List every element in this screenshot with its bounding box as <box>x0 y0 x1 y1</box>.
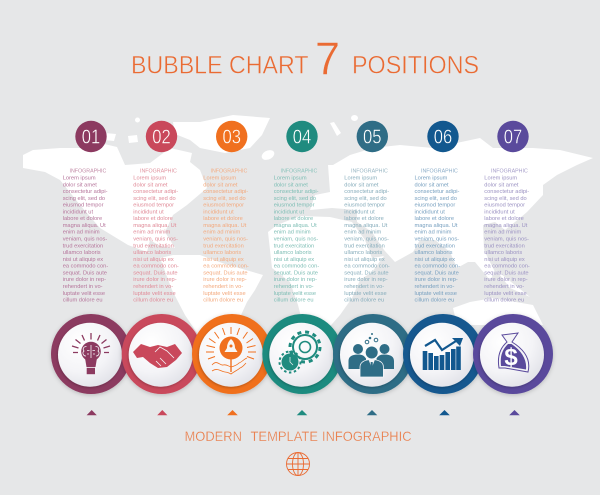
text column 7: rehendert in vo- <box>484 284 524 290</box>
text column 2: eiusmod tempor <box>133 203 174 209</box>
text column 4: INFOGRAPHIC <box>280 168 317 174</box>
text column 1: rehendert in vo- <box>63 284 103 290</box>
text column 4: sequat. Duis aute <box>274 270 318 276</box>
text column 4: veniam, quis nos- <box>274 237 318 243</box>
text column 1: INFOGRAPHIC <box>70 168 106 174</box>
text column 4: nisi ut aliquip ex <box>274 257 314 263</box>
number badge 05: 05 <box>363 127 382 149</box>
text column 1: sequat. Duis aute <box>63 270 107 276</box>
text column 3: magna aliqua. Ut <box>203 223 247 229</box>
world map <box>23 115 593 350</box>
text column 1: magna aliqua. Ut <box>63 223 106 229</box>
text column 5: incididunt ut <box>344 209 375 215</box>
text column 4: incididunt ut <box>274 209 304 215</box>
icon: money bag: $ <box>504 344 518 371</box>
text column 2: sequat. Duis aute <box>133 270 178 276</box>
text column 5: rehendert in vo- <box>344 284 384 290</box>
text column 1: Lorem ipsum <box>63 176 96 182</box>
text column 2: rehendert in vo- <box>133 284 173 290</box>
text column 3: sequat. Duis aute <box>203 270 248 276</box>
text column 1: luptate velit esse <box>63 291 105 297</box>
text column 4: eiusmod tempor <box>274 203 315 209</box>
text column 3: cillum dolore eu <box>203 298 243 304</box>
footer heading: INFOGRAPHIC <box>322 428 412 444</box>
text column 6: cillum dolore eu <box>414 298 454 304</box>
text column 4: trud exercitation <box>274 243 314 249</box>
text column 6: eiusmod tempor <box>414 203 455 209</box>
text column 6: incididunt ut <box>414 209 445 215</box>
text column 4: rehendert in vo- <box>274 284 314 290</box>
text column 1: labore et dolore <box>63 216 102 222</box>
text column 2: enim ad minim <box>133 230 171 236</box>
text column 5: ullamco laboris <box>344 250 382 256</box>
text column 2: labore et dolore <box>133 216 173 222</box>
bubble 6 <box>403 314 483 394</box>
bubble 7 <box>473 314 553 394</box>
text column 7: nisi ut aliquip ex <box>484 257 525 263</box>
text column 2: magna aliqua. Ut <box>133 223 177 229</box>
text column 2: dolor sit amet <box>133 182 168 188</box>
text column 1: ea commodo con- <box>63 264 108 270</box>
number badge 03 <box>216 121 247 152</box>
text column 1: irure dolor in rep- <box>63 277 106 283</box>
text column 5: sequat. Duis aute <box>344 270 389 276</box>
text column 5: magna aliqua. Ut <box>344 223 388 229</box>
text column 3: consectetur adipi- <box>203 189 248 195</box>
text column 6: dolor sit amet <box>414 182 449 188</box>
number badge 02: 02 <box>152 127 171 149</box>
text column 4: ea commodo con- <box>274 264 319 270</box>
text column 7: scing elit, sed do <box>484 196 527 202</box>
text column 5: veniam, quis nos- <box>344 237 389 243</box>
text column 4: dolor sit amet <box>274 182 308 188</box>
text column 5: cillum dolore eu <box>344 298 384 304</box>
text column 3: rehendert in vo- <box>203 284 243 290</box>
text column 6: irure dolor in rep- <box>414 277 458 283</box>
text column 1: cillum dolore eu <box>63 298 103 304</box>
text column 2: incididunt ut <box>133 209 164 215</box>
text column 5: consectetur adipi- <box>344 189 389 195</box>
text column 4 <box>274 168 319 304</box>
text column 4: magna aliqua. Ut <box>274 223 317 229</box>
text column 6: ea commodo con- <box>414 264 460 270</box>
text column 3: scing elit, sed do <box>203 196 246 202</box>
text column 3: eiusmod tempor <box>203 203 244 209</box>
text column 2: irure dolor in rep- <box>133 277 177 283</box>
icon: gears <box>280 332 320 372</box>
text column 7: luptate velit esse <box>484 291 527 297</box>
text column 1: dolor sit amet <box>63 182 97 188</box>
text column 7: INFOGRAPHIC <box>491 168 528 174</box>
text column 7: enim ad minim <box>484 230 522 236</box>
text column 2: veniam, quis nos- <box>133 237 178 243</box>
text column 1: enim ad minim <box>63 230 100 236</box>
text column 7: dolor sit amet <box>484 182 519 188</box>
text column 3: luptate velit esse <box>203 291 246 297</box>
text column 7: magna aliqua. Ut <box>484 223 528 229</box>
text column 3: Lorem ipsum <box>203 176 236 182</box>
text column 1: trud exercitation <box>63 243 103 249</box>
text column 5: luptate velit esse <box>344 291 387 297</box>
text column 5: Lorem ipsum <box>344 176 377 182</box>
text column 3: INFOGRAPHIC <box>210 168 247 174</box>
text column 3 <box>203 168 249 304</box>
text column 2: cillum dolore eu <box>133 298 173 304</box>
text column 6: INFOGRAPHIC <box>421 168 458 174</box>
number badge 07 <box>497 121 529 152</box>
number badge 02 <box>146 121 177 152</box>
text column 6: enim ad minim <box>414 230 452 236</box>
text column 3: nisi ut aliquip ex <box>203 257 244 263</box>
text column 7: sequat. Duis aute <box>484 270 529 276</box>
text column 6: veniam, quis nos- <box>414 237 459 243</box>
text column 1: ullamco laboris <box>63 250 101 256</box>
text column 4: irure dolor in rep- <box>274 277 317 283</box>
number badge 07: 07 <box>504 127 522 149</box>
bubble 4 <box>262 314 342 394</box>
text column 7: eiusmod tempor <box>484 203 525 209</box>
text column 1: veniam, quis nos- <box>63 237 107 243</box>
text column 5 <box>344 168 390 304</box>
text column 5: trud exercitation <box>344 243 385 249</box>
text column 2: ea commodo con- <box>133 264 179 270</box>
icon: handshake <box>133 344 182 368</box>
text column 4: enim ad minim <box>274 230 311 236</box>
number badge 01 <box>75 121 107 152</box>
text column 2: Lorem ipsum <box>133 176 166 182</box>
text column 3: veniam, quis nos- <box>203 237 248 243</box>
text column 6: Lorem ipsum <box>414 176 448 182</box>
title: 7 <box>315 32 340 84</box>
number badge 04 <box>286 121 318 152</box>
text column 2: ullamco laboris <box>133 250 171 256</box>
text column 6: sequat. Duis aute <box>414 270 459 276</box>
bubble 5 <box>333 314 413 394</box>
number badge 06: 06 <box>434 127 452 149</box>
number badge 03: 03 <box>222 127 241 149</box>
text column 2: nisi ut aliquip ex <box>133 257 174 263</box>
text column 2: consectetur adipi- <box>133 189 178 195</box>
number badge 01: 01 <box>82 127 100 149</box>
bubble 1 <box>51 314 131 394</box>
text column 6: rehendert in vo- <box>414 284 454 290</box>
text column 2: trud exercitation <box>133 243 174 249</box>
text column 5: scing elit, sed do <box>344 196 387 202</box>
icon: business team <box>348 333 394 377</box>
text column 7: trud exercitation <box>484 243 525 249</box>
text column 7: ea commodo con- <box>484 264 530 270</box>
text column 5: irure dolor in rep- <box>344 277 388 283</box>
text column 6 <box>414 168 460 304</box>
text column 7: irure dolor in rep- <box>484 277 528 283</box>
text column 4: Lorem ipsum <box>274 176 307 182</box>
text column 1: eiusmod tempor <box>63 203 104 209</box>
text column 7: labore et dolore <box>484 216 524 222</box>
text column 2 <box>133 168 179 304</box>
text column 7: incididunt ut <box>484 209 515 215</box>
text column 7: veniam, quis nos- <box>484 237 529 243</box>
text column 2: luptate velit esse <box>133 291 176 297</box>
text column 2: scing elit, sed do <box>133 196 176 202</box>
text column 4: labore et dolore <box>274 216 313 222</box>
text column 7: ullamco laboris <box>484 250 522 256</box>
title: BUBBLE CHART <box>131 52 308 80</box>
text column 4: ullamco laboris <box>274 250 312 256</box>
text column 6: luptate velit esse <box>414 291 457 297</box>
title <box>131 32 479 84</box>
pointer triangles <box>87 410 520 415</box>
text column 7: consectetur adipi- <box>484 189 529 195</box>
text column 5: labore et dolore <box>344 216 384 222</box>
text column 3: irure dolor in rep- <box>203 277 247 283</box>
text column 5: nisi ut aliquip ex <box>344 257 385 263</box>
text column 6: magna aliqua. Ut <box>414 223 458 229</box>
text column 1 <box>63 168 108 304</box>
text column 3: enim ad minim <box>203 230 241 236</box>
text column 5: enim ad minim <box>344 230 382 236</box>
text column 3: trud exercitation <box>203 243 244 249</box>
text column 7: Lorem ipsum <box>484 176 517 182</box>
text column 1: consectetur adipi- <box>63 189 108 195</box>
footer heading: TEMPLATE <box>250 428 318 444</box>
text column 5: dolor sit amet <box>344 182 379 188</box>
text column 1: incididunt ut <box>63 209 93 215</box>
icon: light bulb <box>72 333 110 374</box>
number badge 06 <box>427 121 459 152</box>
text column 3: labore et dolore <box>203 216 243 222</box>
text column 2: INFOGRAPHIC <box>140 168 177 174</box>
number badge 05 <box>357 121 388 152</box>
number badge 04: 04 <box>293 127 311 149</box>
text column 5: INFOGRAPHIC <box>351 168 388 174</box>
text column 6: scing elit, sed do <box>414 196 457 202</box>
icon: globe <box>286 452 310 476</box>
text column 6: consectetur adipi- <box>414 189 459 195</box>
text column 1: nisi ut aliquip ex <box>63 257 103 263</box>
text column 6: trud exercitation <box>414 243 455 249</box>
text column 4: consectetur adipi- <box>274 189 319 195</box>
text column 5: eiusmod tempor <box>344 203 385 209</box>
text column 3: dolor sit amet <box>203 182 238 188</box>
text column 6: ullamco laboris <box>414 250 453 256</box>
text column 5: ea commodo con- <box>344 264 390 270</box>
bubble 2 <box>122 314 202 394</box>
text column 6: nisi ut aliquip ex <box>414 257 455 263</box>
bubble 3 <box>192 314 272 394</box>
footer heading <box>184 428 412 444</box>
text column 3: incididunt ut <box>203 209 234 215</box>
text column 3: ullamco laboris <box>203 250 241 256</box>
footer heading: MODERN <box>184 428 242 444</box>
text column 4: scing elit, sed do <box>274 196 316 202</box>
text column 1: scing elit, sed do <box>63 196 105 202</box>
text column 3: ea commodo con- <box>203 264 249 270</box>
text column 7: cillum dolore eu <box>484 298 524 304</box>
text column 4: cillum dolore eu <box>274 298 314 304</box>
text column 4: luptate velit esse <box>274 291 316 297</box>
text column 7 <box>484 168 530 304</box>
icon: rising chart <box>423 338 463 370</box>
title: POSITIONS <box>352 52 479 80</box>
text column 6: labore et dolore <box>414 216 454 222</box>
icon: rocket and sun <box>206 327 256 374</box>
